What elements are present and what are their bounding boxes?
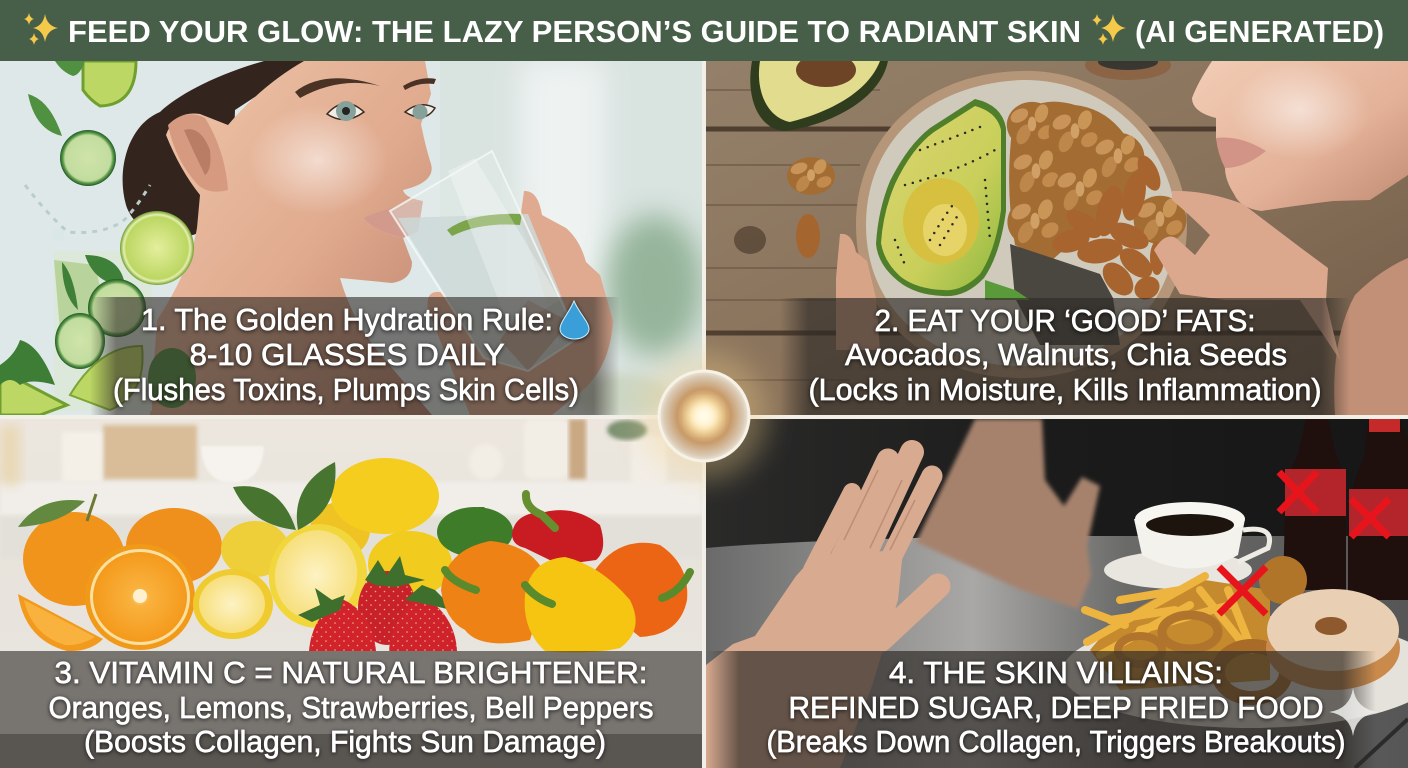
caption 2: Avocados, Walnuts, Chia Seeds [845,337,1287,372]
panel: vitamin C [0,419,702,768]
coffee cup [1104,502,1270,589]
panel: good fats [706,50,1408,415]
lemons [193,458,452,639]
caption 1: 8-10 GLASSES DAILY [190,337,504,372]
icon: water drop [560,301,589,339]
cola bottles [1283,419,1408,600]
caption band 3 [0,651,702,768]
caption 3: Oranges, Lemons, Strawberries, Bell Peppers [48,690,654,725]
chia seeds [985,244,1120,345]
raised hand saying stop [706,452,938,768]
avocado half in bowl [876,99,1006,296]
caption 2: 2. EAT YOUR ‘GOOD’ FATS: [874,303,1256,338]
center glowing orb [640,352,768,480]
icon: sparkles left [24,13,58,45]
panel: skin villains [706,419,1408,768]
panel: hydration [0,61,703,417]
caption 3: 3. VITAMIN C = NATURAL BRIGHTENER: [54,655,648,690]
caption 4 [766,655,1346,759]
glass of water [390,151,578,371]
marble kitchen background [0,419,702,768]
caption 2: (Locks in Moisture, Kills Inflammation) [808,372,1322,407]
halved avocado, top [750,61,888,131]
caption 1: (Flushes Toxins, Plumps Skin Cells) [113,372,579,407]
caption band 1 [90,297,620,415]
strawberries [298,556,460,651]
hand holding glass [428,191,613,415]
bowl [856,71,1187,378]
bright kitchen background [0,61,703,417]
hands picking nuts [836,191,1340,360]
caption 4: 4. THE SKIN VILLAINS: [889,655,1223,690]
blurred rear hand [916,419,1100,609]
caption 1: 1. The Golden Hydration Rule: [141,302,553,337]
caption 4: REFINED SUGAR, DEEP FRIED FOOD [788,690,1324,725]
infused water jar with limes and cucumber [0,61,196,415]
caption 3: (Boosts Collagen, Fights Sun Damage) [84,724,606,759]
woman's face and neck [1192,60,1408,415]
loose walnut and almond [787,157,835,258]
walnuts [1007,102,1186,262]
lemon leaves [233,462,336,530]
AI generated note: (AI GENERATED) [1135,14,1384,49]
caption band 2 [780,298,1350,415]
caption 3 [48,655,654,759]
caption 4: (Breaks Down Collagen, Triggers Breakouts) [766,724,1346,759]
caption 2 [808,303,1322,407]
wooden table [706,61,1408,415]
almonds [1050,152,1165,304]
sparkle watermark [1329,688,1378,736]
red X marks [1219,472,1389,614]
oranges [18,494,222,651]
icon: sparkles right [1092,14,1126,45]
woman drinking water [123,61,436,415]
dark background and table [706,419,1408,768]
header bar [0,0,1408,61]
plate of fried food and donut [1062,556,1408,768]
caption band 4 [706,651,1376,768]
caption 1 [113,301,589,407]
small jar of seeds [1085,61,1171,80]
title: FEED YOUR GLOW: THE LAZY PERSON’S GUIDE TO RADIANT SKIN [68,14,1081,49]
bell peppers [437,494,690,652]
